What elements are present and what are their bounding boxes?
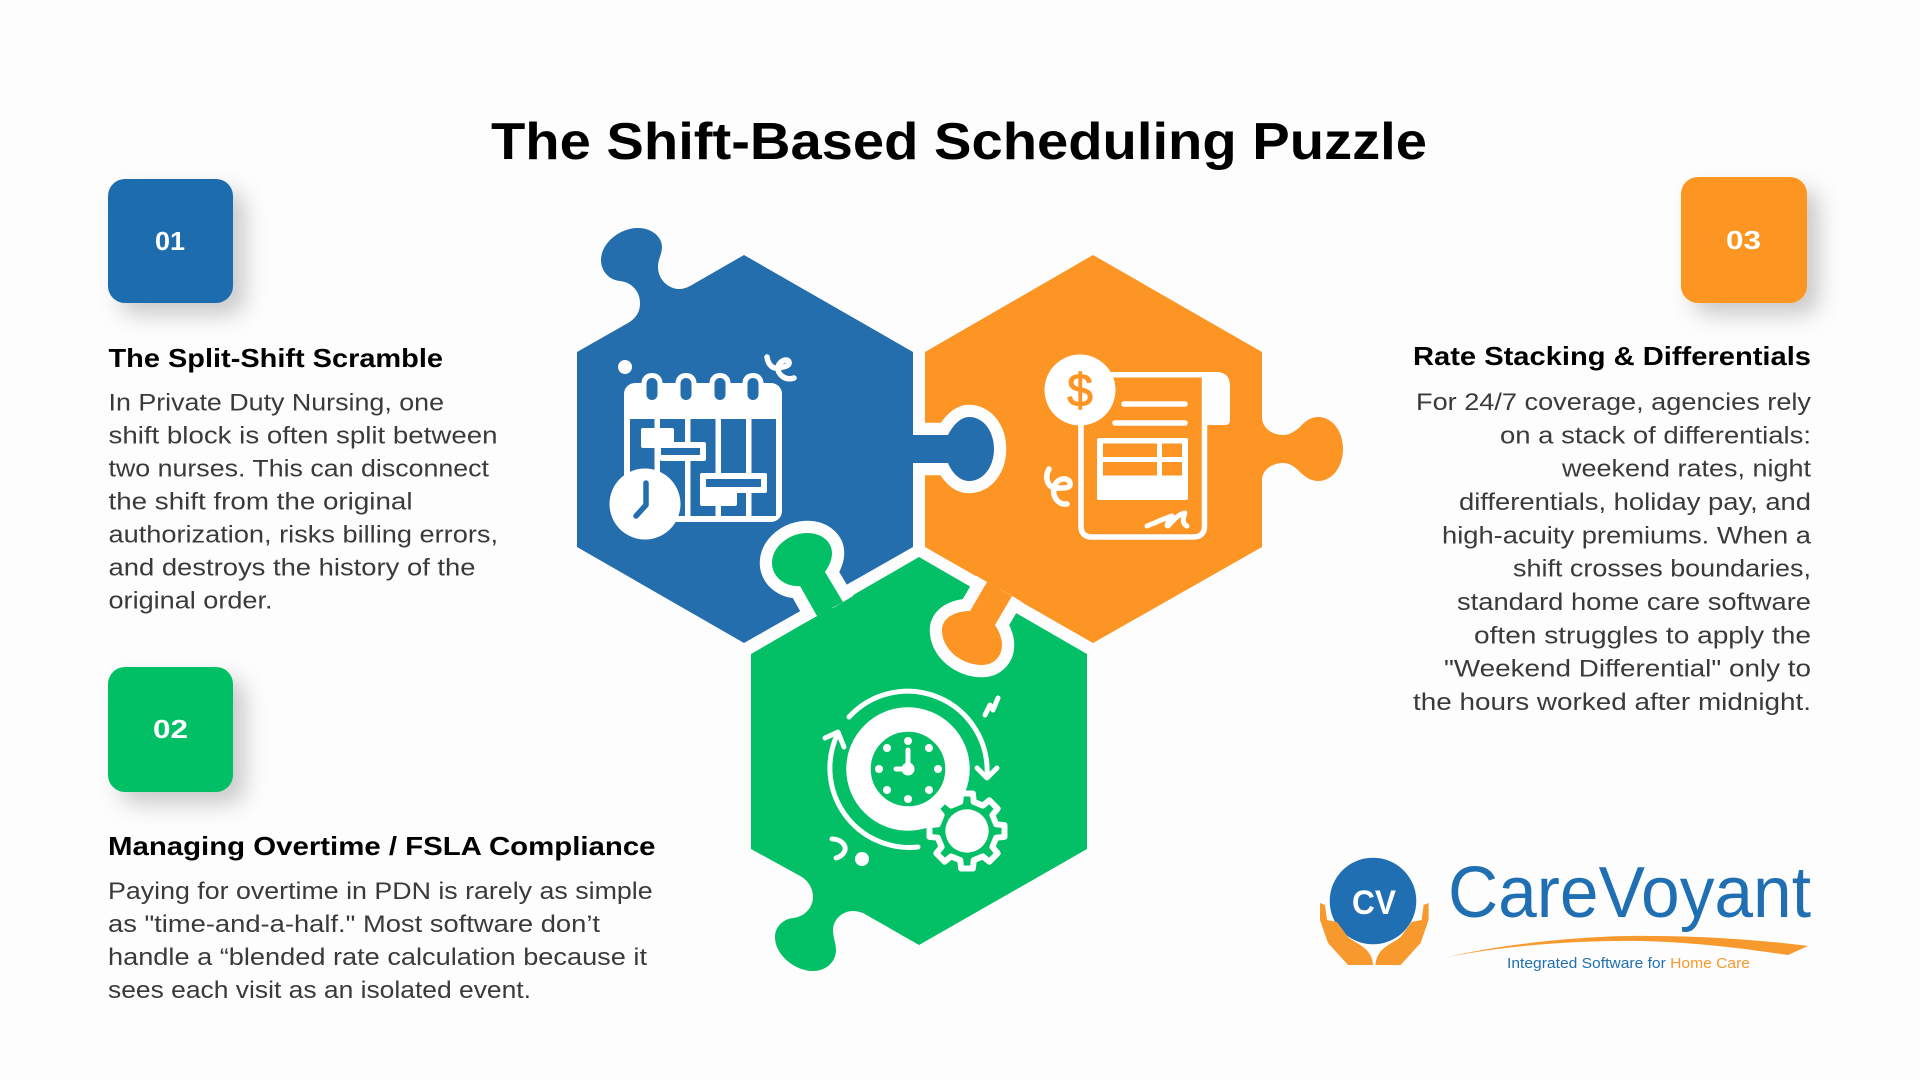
logo wordmark: CareVoyant <box>1448 853 1811 933</box>
puzzle tab: blue into orange <box>913 417 994 481</box>
body text: rate stacking: "Weekend Differential" only to <box>1444 656 1811 683</box>
body text: overtime compliance: handle a “blended rate calculation because it <box>108 944 647 971</box>
title: The Shift-Based Scheduling Puzzle <box>491 113 1427 171</box>
body text: rate stacking <box>1413 389 1812 716</box>
body text: overtime compliance: as "time-and-a-half." Most software don’t <box>108 911 600 938</box>
logo tagline: Integrated Software for Home Care <box>1507 955 1750 972</box>
body text: overtime compliance <box>108 878 653 1004</box>
body text: rate stacking: For 24/7 coverage, agencies rely <box>1416 389 1811 416</box>
body text: rate stacking: shift crosses boundaries, <box>1513 556 1811 583</box>
body text: rate stacking: often struggles to apply the <box>1474 622 1811 649</box>
icon: invoice with dollar: $ <box>1067 364 1093 416</box>
badge 02: 02 <box>153 714 188 744</box>
panel: 03 rate stacking <box>1413 177 1812 716</box>
puzzle piece: green hexagon <box>751 557 1087 971</box>
puzzle piece: blue hexagon <box>577 228 913 643</box>
panel: 02 overtime compliance <box>108 667 656 1004</box>
badge 03: 03 <box>1726 225 1761 255</box>
logo emblem: hands holding CV globe: CV <box>1352 884 1396 922</box>
icon: calendar with clock <box>610 357 794 540</box>
badge 03 <box>1681 177 1807 303</box>
body text: overtime compliance: Paying for overtime in PDN is rarely as simple <box>108 878 653 905</box>
puzzle piece: orange hexagon <box>925 255 1343 643</box>
body text: rate stacking: on a stack of differentials: <box>1500 422 1811 449</box>
icon: invoice with dollar <box>1044 354 1230 537</box>
logo swoosh <box>1448 936 1808 957</box>
puzzle tab: orange into green <box>942 582 1012 665</box>
badge 01 <box>108 179 233 303</box>
body text: split-shift scramble: the shift from the original <box>108 489 412 516</box>
body text: rate stacking: standard home care software <box>1457 589 1811 616</box>
icon: clock cycle with gear <box>825 691 1004 868</box>
heading: overtime compliance: Managing Overtime / FSLA Compliance <box>108 831 656 861</box>
body text: split-shift scramble: shift block is often split between <box>108 423 498 450</box>
body text: split-shift scramble: two nurses. This can disconnect <box>108 456 489 483</box>
heading: rate stacking: Rate Stacking & Differentials <box>1413 341 1811 371</box>
logo: CareVoyant <box>1320 853 1811 972</box>
badge 01: 01 <box>155 226 185 256</box>
puzzle tab: green into blue <box>772 533 843 616</box>
body text: rate stacking: differentials, holiday pay, and <box>1459 489 1811 516</box>
body text: rate stacking: weekend rates, night <box>1561 456 1811 483</box>
body text: split-shift scramble <box>108 390 498 615</box>
heading: split-shift scramble: The Split-Shift Scramble <box>108 343 443 373</box>
body text: overtime compliance: sees each visit as an isolated event. <box>108 977 531 1004</box>
body text: split-shift scramble: In Private Duty Nursing, one <box>108 390 444 417</box>
body text: rate stacking: high-acuity premiums. When a <box>1442 522 1812 549</box>
panel: 01 split-shift scramble <box>108 179 498 615</box>
puzzle diagram <box>577 228 1343 971</box>
body text: rate stacking: the hours worked after midnight. <box>1413 689 1811 716</box>
body text: split-shift scramble: and destroys the history of the <box>108 555 476 582</box>
body text: split-shift scramble: authorization, risks billing errors, <box>108 522 498 549</box>
body text: split-shift scramble: original order. <box>108 588 272 615</box>
badge 02 <box>108 667 233 792</box>
logo emblem: hands holding CV globe <box>1320 858 1429 965</box>
